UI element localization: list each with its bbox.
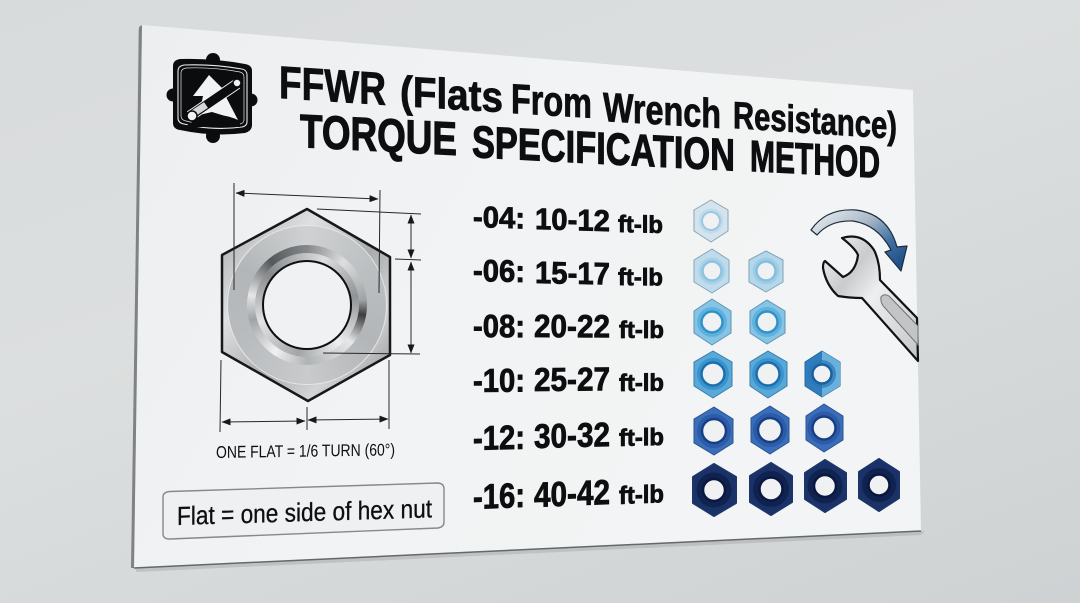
row -10: ft-lb — [619, 370, 664, 397]
row -06: -06: — [473, 253, 525, 289]
row -08: ft-lb — [619, 317, 664, 344]
icon: logo badge — [166, 53, 258, 143]
flat caption: ONE FLAT = 1/6 TURN (60°) — [216, 440, 395, 462]
row -04: 10-12 — [535, 203, 610, 238]
title line 2: SPECIFICATION — [472, 116, 735, 181]
torque rows — [473, 201, 664, 517]
row -16: -16: — [473, 476, 525, 517]
panel shadow — [136, 28, 925, 572]
title line 1: FFWR — [279, 56, 386, 115]
title line 1: Wrench — [603, 84, 721, 137]
hex nut outline — [222, 209, 390, 401]
row -12: ft-lb — [619, 424, 664, 452]
row -08: -08: — [473, 308, 525, 344]
row -12: 30-32 — [534, 416, 610, 456]
callout: flat definition — [163, 483, 444, 539]
row -06: 15-17 — [535, 255, 610, 291]
title line 1: From — [511, 75, 592, 127]
panel: sign board — [134, 25, 921, 568]
row -04: ft-lb — [618, 211, 663, 239]
row -16: ft-lb — [619, 480, 664, 510]
row -10 — [473, 360, 664, 399]
dimension lines — [220, 183, 421, 432]
title line 1 — [279, 56, 897, 148]
row -16 — [473, 473, 664, 517]
title line 1: Resistance) — [733, 95, 897, 148]
row -10: 25-27 — [534, 360, 610, 398]
row -04 — [473, 201, 663, 239]
title line 2 — [300, 104, 880, 188]
nut tally grid — [693, 200, 899, 516]
row -04: -04: — [473, 201, 525, 236]
hex nut rings — [227, 226, 387, 385]
title line 2: TORQUE — [300, 104, 457, 165]
title line 1: (Flats — [400, 68, 503, 122]
row -16: 40-42 — [534, 473, 610, 515]
title — [279, 56, 897, 188]
row -08: 20-22 — [534, 308, 610, 344]
title line 2: METHOD — [750, 132, 880, 188]
row -08 nuts — [694, 299, 785, 345]
callout: flat definition: Flat = one side of hex nut — [177, 493, 433, 531]
row -10 nuts — [694, 351, 840, 398]
row -12 nuts — [694, 404, 843, 455]
icon: rotation arrow — [811, 210, 907, 271]
row -06 nuts — [694, 249, 783, 293]
row -08 — [473, 308, 664, 344]
row -10: -10: — [473, 361, 525, 399]
row -04 nuts — [694, 200, 728, 242]
row -12: -12: — [473, 419, 525, 458]
row -06 — [473, 253, 663, 291]
icon: wrench — [823, 236, 918, 361]
row -06: ft-lb — [618, 264, 663, 291]
row -12 — [473, 416, 664, 458]
row -16 nuts — [693, 459, 899, 516]
